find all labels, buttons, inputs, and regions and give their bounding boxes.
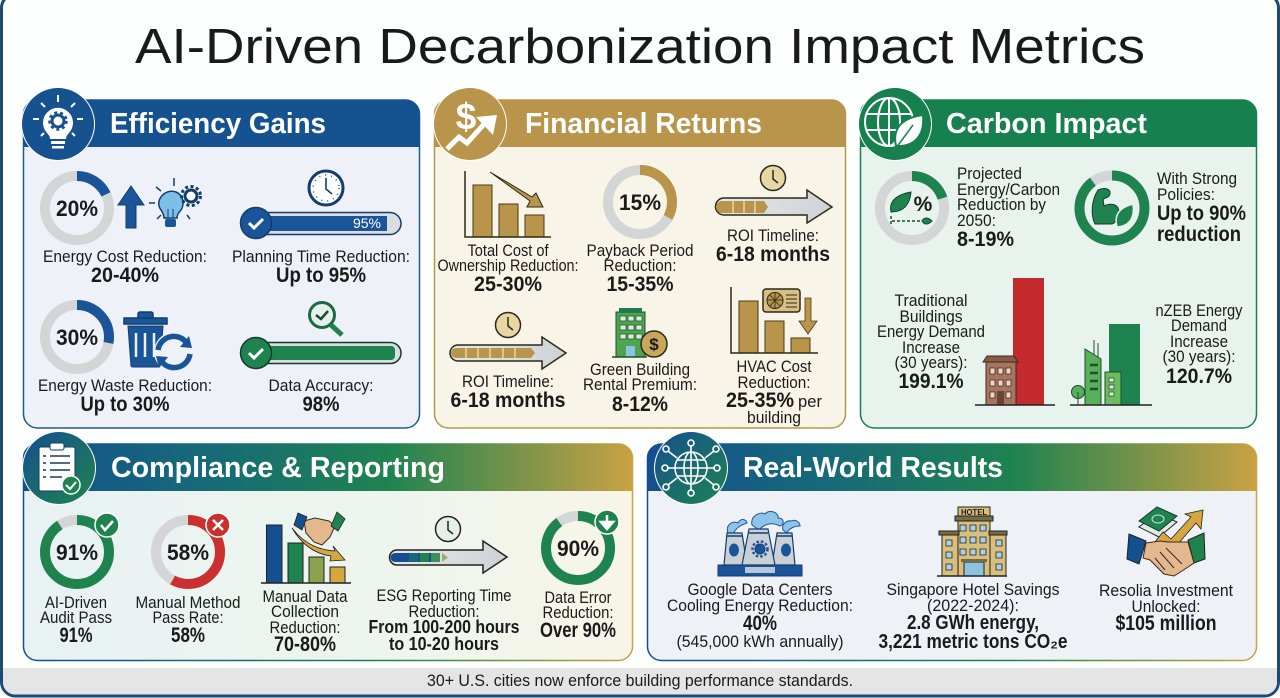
metric: data error reduction: 90%	[557, 536, 599, 561]
metric: data error reduction	[540, 510, 619, 642]
metric: payback period: 15%	[619, 190, 661, 215]
panel: real-world results	[647, 431, 1257, 660]
metric: manual data collection: Collection	[271, 603, 339, 621]
metric: data error reduction: Reduction:	[542, 604, 614, 622]
footer note: 30+ U.S. cities now enforce building performance standards.	[427, 672, 853, 690]
metric: payback period: Payback Period	[586, 242, 694, 260]
chart: nZEB buildings: 120.7%	[1166, 365, 1232, 388]
metric: energy waste reduction: Up to 30%	[80, 393, 170, 416]
metric: HVAC cost reduction: 25-35%	[726, 389, 794, 412]
icon: dollar with rising arrow	[433, 87, 507, 161]
metric: strong policies: Up to 90%	[1157, 202, 1246, 225]
icon: globe with leaf	[858, 87, 932, 161]
metric: projected reduction: %	[914, 193, 933, 216]
metric: manual data collection	[261, 512, 351, 656]
metric: ROI timeline bottom: 6-18 months	[450, 389, 566, 412]
heading: financial returns: Financial Returns	[525, 108, 762, 140]
panel: financial returns	[433, 87, 846, 428]
heading: real-world results: Real-World Results	[743, 452, 1003, 484]
metric: strong policies: Policies:	[1157, 186, 1215, 204]
result: resolia investment: $105 million	[1116, 612, 1216, 635]
metric: AI-driven audit pass: 91%	[56, 540, 98, 565]
result: singapore hotel	[878, 507, 1068, 653]
result: google data centers	[667, 511, 853, 651]
icon: dollar with rising arrow: $	[456, 96, 477, 137]
chart: nZEB buildings	[1070, 302, 1243, 405]
chart: nZEB buildings: (30 years):	[1162, 348, 1236, 366]
metric: payback period: 15-35%	[606, 273, 674, 296]
metric: manual method pass rate: 58%	[171, 624, 205, 647]
metric: data accuracy: 98%	[302, 393, 340, 416]
panel: carbon impact	[858, 87, 1257, 428]
metric: data error reduction: Over 90%	[540, 619, 616, 642]
metric: projected reduction	[880, 165, 1060, 251]
footer note	[3, 668, 1277, 694]
heading: carbon impact: Carbon Impact	[946, 108, 1147, 140]
metric: ESG reporting time: ESG Reporting Time	[376, 587, 512, 605]
metric: energy cost reduction: Energy Cost Reduction:	[43, 248, 207, 266]
metric: projected reduction: Energy/Carbon	[957, 181, 1060, 199]
metric: AI-driven audit pass: 91%	[60, 624, 93, 647]
icon: connected globe	[654, 431, 728, 505]
chart: traditional buildings: Traditional	[894, 292, 968, 310]
metric: planning time reduction: Planning Time Reduction:	[232, 248, 410, 266]
metric: energy cost reduction: 20%	[56, 196, 98, 221]
metric: green building rental premium: $	[649, 335, 659, 354]
result: singapore hotel: HOTEL	[961, 508, 987, 517]
result: google data centers: (545,000 kWh annually)	[676, 633, 844, 651]
metric: energy waste reduction: 30%	[56, 325, 98, 350]
result: singapore hotel: Singapore Hotel Savings	[886, 581, 1060, 599]
metric: energy waste reduction: Energy Waste Reduction:	[38, 377, 212, 395]
result: google data centers: 40%	[743, 612, 777, 635]
metric: HVAC cost reduction: per	[798, 393, 822, 411]
metric: manual method pass rate: Pass Rate:	[152, 609, 224, 627]
chart: traditional buildings: (30 years):	[894, 354, 968, 372]
heading: compliance and reporting: Compliance & Reporting	[111, 452, 445, 484]
metric: payback period	[586, 170, 694, 296]
metric: HVAC cost reduction	[726, 287, 822, 427]
chart: traditional buildings: 199.1%	[898, 370, 964, 393]
metric: ROI timeline bottom: ROI Timeline:	[462, 373, 554, 391]
metric: ESG reporting time	[368, 516, 520, 654]
metric: energy waste reduction	[38, 305, 212, 416]
metric: strong policies	[1080, 170, 1246, 246]
metric: planning time reduction: Up to 95%	[276, 264, 366, 287]
metric: total cost of ownership	[438, 171, 578, 296]
metric: manual data collection: 70-80%	[274, 633, 336, 656]
metric: manual method pass rate	[136, 513, 240, 647]
icon: lightbulb with gear	[21, 87, 95, 161]
panel: efficiency gains	[21, 87, 420, 428]
metric: ESG reporting time: to 10-20 hours	[389, 634, 499, 654]
metric: green building rental premium: Green Building	[590, 361, 690, 379]
result: google data centers: Google Data Centers	[688, 581, 832, 599]
chart: traditional buildings	[877, 278, 1055, 405]
metric: planning time reduction	[232, 171, 410, 287]
heading: efficiency gains: Efficiency Gains	[110, 108, 326, 140]
metric: projected reduction: Projected	[957, 165, 1022, 183]
metric: green building rental premium: 8-12%	[612, 393, 668, 416]
metric: manual data collection: Manual Data	[262, 588, 348, 606]
metric: data error reduction: Data Error	[544, 589, 612, 607]
result: resolia investment: Resolia Investment	[1099, 582, 1233, 600]
result: resolia investment: Unlocked:	[1132, 598, 1200, 616]
title: AI-Driven Decarbonization Impact Metrics	[135, 20, 1145, 74]
metric: ROI timeline top	[716, 166, 832, 266]
metric: ROI timeline bottom	[450, 312, 566, 412]
metric: total cost of ownership: Ownership Reduction:	[438, 257, 578, 275]
metric: ROI timeline top: ROI Timeline:	[727, 227, 819, 245]
metric: total cost of ownership: Total Cost of	[468, 242, 549, 260]
metric: ESG reporting time: From 100-200 hours	[368, 617, 520, 637]
chart: nZEB buildings: Increase	[1170, 333, 1228, 351]
metric: payback period: Reduction:	[604, 257, 676, 275]
metric: projected reduction: 2050:	[957, 212, 996, 230]
metric: green building rental premium: Rental Premium:	[583, 376, 697, 394]
metric: planning time reduction: 95%	[353, 215, 381, 231]
metric: strong policies: With Strong	[1157, 170, 1237, 188]
metric: manual method pass rate: 58%	[167, 540, 209, 565]
result: google data centers: Cooling Energy Reduction:	[667, 597, 853, 615]
chart: nZEB buildings: Demand	[1171, 317, 1227, 335]
metric: energy cost reduction	[43, 176, 207, 287]
metric: strong policies: reduction	[1157, 223, 1241, 246]
metric: data accuracy: Data Accuracy:	[268, 377, 374, 395]
panel: compliance and reporting	[22, 431, 633, 660]
chart: nZEB buildings: nZEB Energy	[1156, 302, 1243, 320]
metric: AI-driven audit pass: Audit Pass	[40, 609, 112, 627]
metric: manual data collection: Reduction:	[270, 619, 340, 637]
metric: energy cost reduction: 20-40%	[91, 264, 159, 287]
metric: ROI timeline top: 6-18 months	[716, 243, 830, 266]
metric: ESG reporting time: Reduction:	[408, 603, 480, 621]
metric: projected reduction: 8-19%	[957, 228, 1014, 251]
chart: traditional buildings: Increase	[902, 339, 960, 357]
icon: clipboard with check	[22, 431, 96, 505]
result: resolia investment	[1099, 507, 1233, 635]
metric: total cost of ownership: 25-30%	[474, 273, 542, 296]
metric: AI-driven audit pass: AI-Driven	[45, 594, 107, 612]
chart: traditional buildings: Energy Demand	[877, 323, 985, 341]
metric: data accuracy	[240, 302, 401, 416]
metric: HVAC cost reduction: building	[747, 409, 801, 427]
result: singapore hotel: 3,221 metric tons CO₂e	[878, 631, 1068, 653]
metric: AI-driven audit pass	[40, 513, 119, 647]
result: singapore hotel: 2.8 GWh energy,	[907, 612, 1039, 634]
metric: manual method pass rate: Manual Method	[136, 594, 240, 612]
metric: HVAC cost reduction: Reduction:	[738, 374, 810, 392]
chart: traditional buildings: Buildings	[900, 308, 962, 326]
metric: green building rental premium	[583, 308, 697, 416]
metric: HVAC cost reduction: HVAC Cost	[736, 358, 812, 376]
metric: projected reduction: Reduction by	[957, 196, 1047, 214]
result: singapore hotel: (2022-2024):	[927, 597, 1019, 615]
